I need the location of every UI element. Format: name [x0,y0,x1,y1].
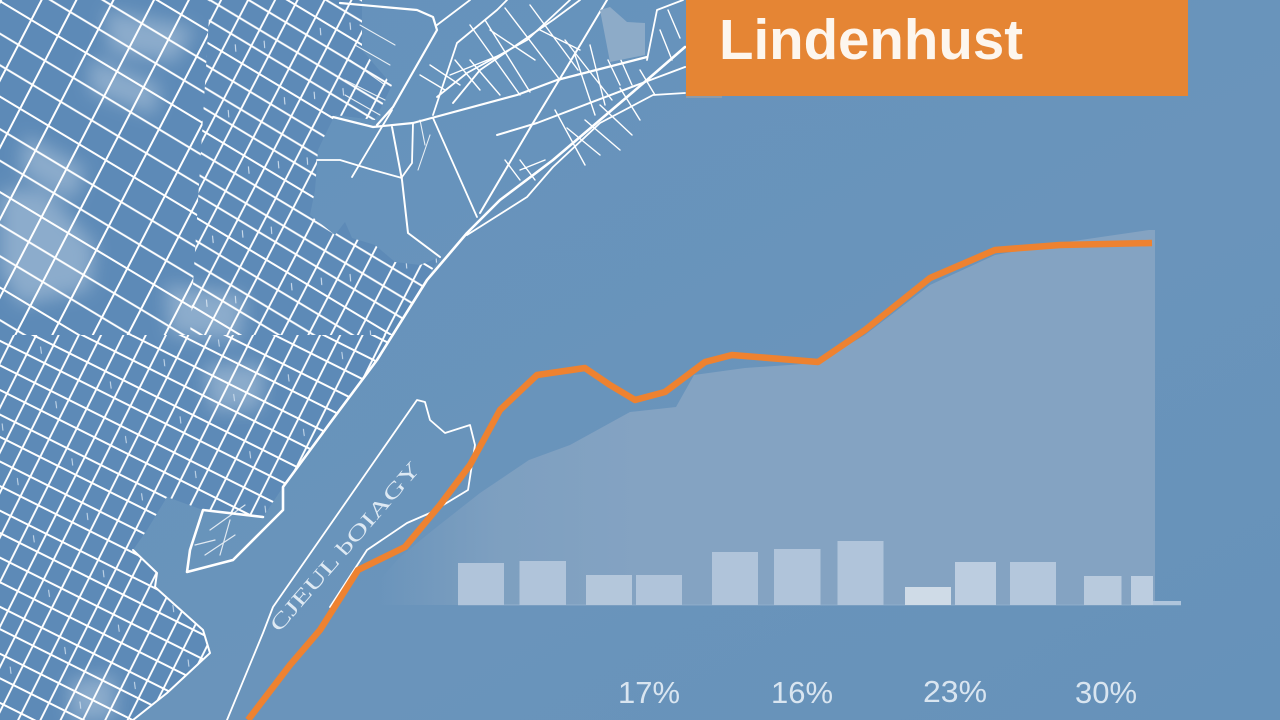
barrier island label: CJEUL bOIAGY [265,457,425,636]
land mass with street grid [0,0,470,720]
trend line [248,243,1152,720]
coast roads [133,0,685,720]
bar chart [458,541,1181,606]
percentage labels: 30% [1075,675,1137,710]
title banner: Lindenhust [719,8,1023,72]
barrier island outline [227,400,475,720]
percentage labels: 23% [923,674,987,709]
percentage labels: 17% [618,675,680,710]
pale patches on the map [0,10,265,720]
percentage labels: 16% [771,675,833,710]
area chart [375,230,1155,605]
street map of the coast [0,0,685,720]
park block [600,7,645,62]
title banner [686,0,1188,98]
percentage labels [618,674,1137,710]
